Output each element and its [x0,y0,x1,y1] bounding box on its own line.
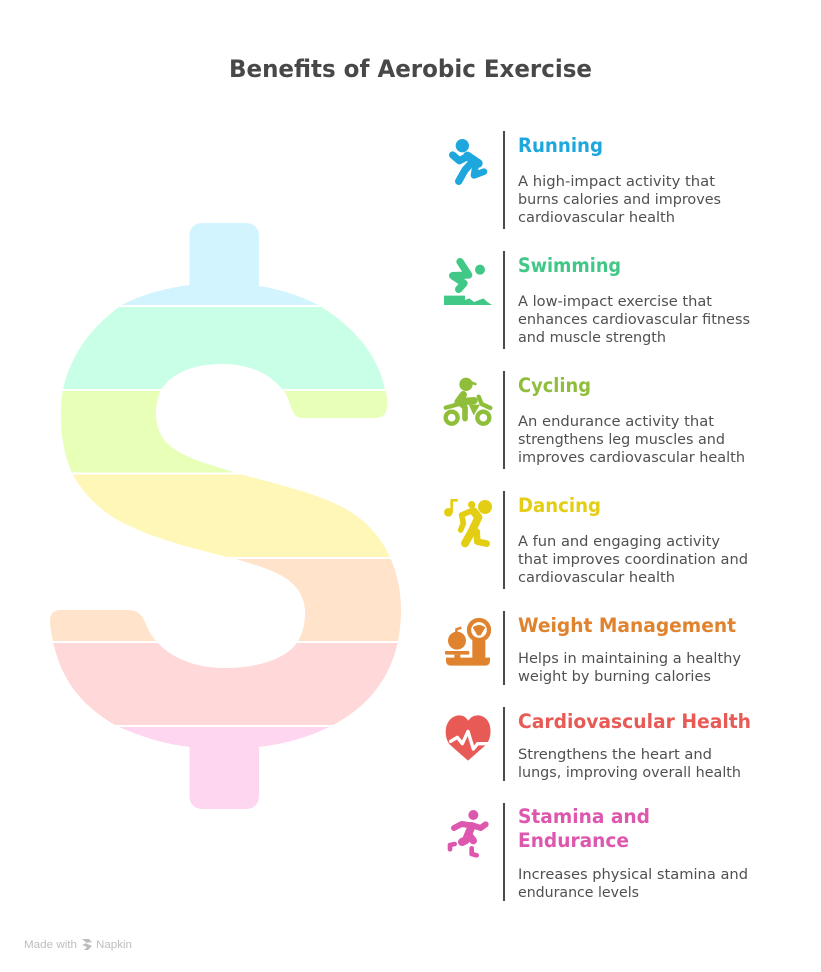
item: stamina and endurance [450,803,748,901]
description: A fun and engaging activity [518,534,720,550]
description: lungs, improving overall health [518,765,741,781]
heading: Stamina and [518,805,650,828]
description: endurance levels [518,885,639,901]
icon: sprinter [450,810,486,855]
description: enhances cardiovascular fitness [518,312,750,328]
heading: Running [518,134,603,157]
divider [503,371,505,469]
title: Benefits of Aerobic Exercise [229,55,592,83]
divider [503,611,505,685]
description: An endurance activity that [518,414,715,430]
description: burns calories and improves [518,192,721,208]
band: weight management [40,559,410,641]
item: dancing [444,491,748,589]
icon: runner [453,139,484,181]
divider [503,803,505,901]
item: weight management [445,611,741,685]
heading: Cardiovascular Health [518,710,751,733]
divider [503,131,505,229]
description: improves cardiovascular health [518,450,745,466]
heading: Cycling [518,374,591,397]
description [518,414,745,466]
icon: dancer [444,500,492,544]
band: dancing [72,474,390,557]
description [518,534,748,586]
footer: made with Napkin: Napkin [96,939,132,951]
icon: diver [444,262,492,305]
description: Strengthens the heart and [518,747,712,763]
divider [503,707,505,781]
heading: Dancing [518,494,601,517]
description: weight by burning calories [518,669,711,685]
description: cardiovascular health [518,570,675,586]
description: that improves coordination and [518,552,748,568]
band: stamina and endurance [120,727,328,809]
heading: Endurance [518,829,629,852]
description: and muscle strength [518,330,666,346]
item: running [453,131,721,229]
description: A high-impact activity that [518,174,716,190]
description: Helps in maintaining a healthy [518,651,741,667]
description [518,651,741,685]
description: cardiovascular health [518,210,675,226]
icon: heart with pulse [446,715,491,761]
item: swimming [444,251,750,349]
description: Increases physical stamina and [518,867,748,883]
icon: scale and apple [445,620,490,666]
footer: made with Napkin: Made with [24,939,77,951]
dollar sign graphic [40,223,410,809]
description: strengthens leg muscles and [518,432,725,448]
description: A low-impact exercise that [518,294,713,310]
description [518,747,741,781]
description [518,294,750,346]
band: running [122,223,318,305]
description [518,174,721,226]
icon: cyclist [446,378,490,424]
band: swimming [63,307,385,389]
heading: Weight Management [518,614,736,637]
item: cycling [446,371,745,469]
footer: made with Napkin [24,939,132,951]
heading: Swimming [518,254,621,277]
description [518,867,748,901]
divider [503,491,505,589]
heading [518,805,650,852]
band: cycling [61,391,388,472]
item: cardiovascular health [446,707,751,781]
band: cardiovascular health [40,643,410,725]
divider [503,251,505,349]
